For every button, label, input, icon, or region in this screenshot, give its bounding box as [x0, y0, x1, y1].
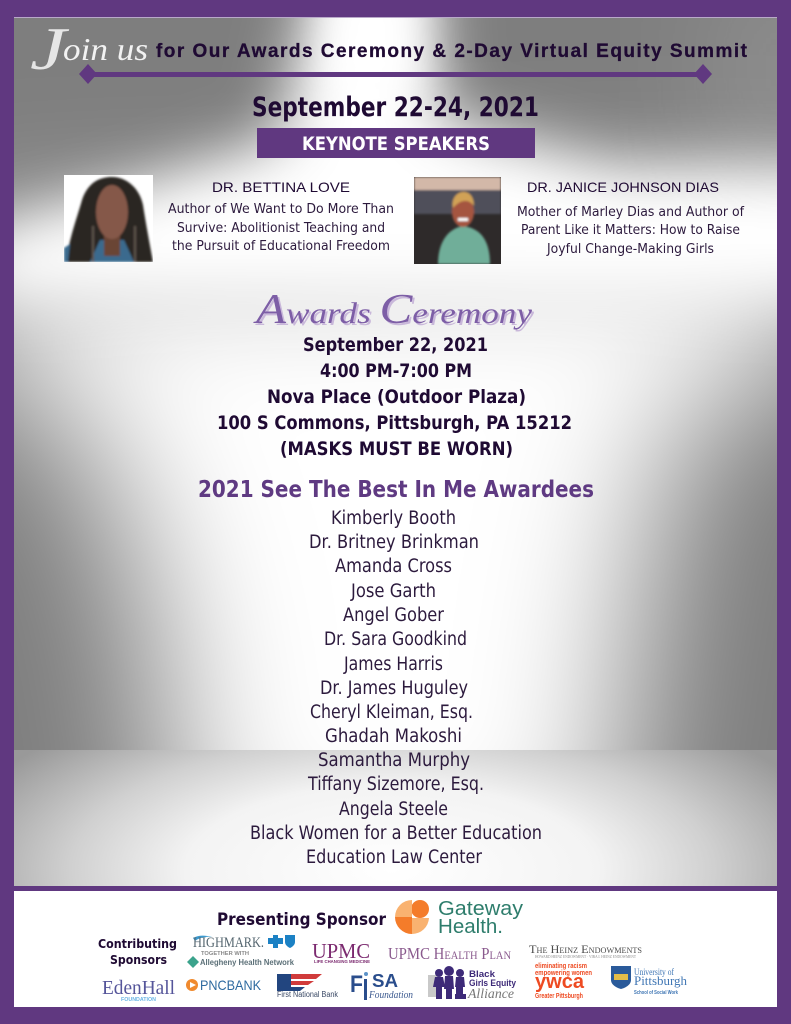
list: awardee names: Dr. Britney Brinkman — [309, 532, 479, 553]
logo: UPMC: LIFE CHANGING MEDICINE — [314, 959, 370, 964]
script heading: Join us: oin us — [63, 31, 148, 67]
text: Dr. Bettina Love bio: DR. BETTINA LOVE — [212, 179, 350, 195]
logo: YWCA Greater Pittsburgh: eliminating racism — [535, 961, 587, 970]
text block: event details — [217, 334, 572, 460]
text block: event details: 100 S Commons, Pittsburgh, PA 15212 — [217, 412, 572, 434]
list: awardee names: Dr. James Huguley — [320, 678, 468, 699]
text: Dr. Bettina Love bio: Survive: Abolitionist Teaching and — [177, 220, 385, 236]
text block: event details: (MASKS MUST BE WORN) — [280, 438, 513, 460]
list: awardee names: Angela Steele — [339, 799, 448, 820]
list: awardee names: Kimberly Booth — [331, 508, 456, 529]
list: awardee names: James Harris — [343, 654, 443, 675]
logo: FISA Foundation — [350, 971, 413, 1001]
logo: University of Pittsburgh: School of Social Work — [634, 990, 679, 996]
text block: event details: Nova Place (Outdoor Plaza) — [267, 386, 526, 408]
logo: Gateway Health — [395, 898, 523, 938]
logo: Gateway Health: Gateway — [438, 898, 523, 920]
list: awardee names: Ghadah Makoshi — [325, 726, 462, 747]
logo: Eden Hall Foundation: FOUNDATION — [121, 997, 156, 1003]
heading: presenting sponsor: Presenting Sponsor — [217, 910, 387, 929]
label: contributing sponsors: Sponsors — [110, 953, 167, 967]
text: Dr. Bettina Love bio: the Pursuit of Educational Freedom — [172, 238, 390, 254]
logo: Highmark and Allegheny Health Network — [187, 935, 295, 968]
script heading: Awards Ceremony: Awards Ceremony — [252, 287, 533, 333]
text: Dr. Janice Johnson Dias bio: Parent Like it Matters: How to Raise — [521, 222, 740, 238]
list: awardee names: Jose Garth — [350, 581, 436, 602]
logo: First National Bank — [277, 974, 339, 999]
text: Dr. Janice Johnson Dias bio — [517, 179, 745, 257]
heading: awardees: 2021 See The Best In Me Awardees — [198, 475, 594, 503]
logo: FISA Foundation: F — [350, 971, 363, 998]
logo: FISA Foundation: SA — [372, 971, 398, 991]
logo: YWCA Greater Pittsburgh: empowering women — [535, 968, 592, 977]
logo: YWCA Greater Pittsburgh — [535, 961, 592, 1000]
list: awardee names: Angel Gober — [343, 605, 444, 626]
logo: UPMC Health Plan: UPMC Health Plan — [388, 944, 511, 963]
logo: Black Girls Equity Alliance: Alliance — [467, 987, 514, 1002]
script heading: Awards Ceremony: Awards Ceremony — [254, 289, 535, 335]
banner: keynote speakers: KEYNOTE SPEAKERS — [302, 134, 490, 155]
logo: Highmark and Allegheny Health Network: Allegheny Health Network — [200, 957, 294, 967]
logo: Highmark and Allegheny Health Network: TOGETHER WITH — [201, 951, 249, 957]
logo: Eden Hall Foundation: EdenHall — [102, 977, 175, 999]
script heading: Join us: J — [30, 16, 69, 82]
label: contributing sponsors — [98, 937, 177, 967]
logo: FISA Foundation: Foundation — [368, 989, 413, 1001]
logo: YWCA Greater Pittsburgh: Greater Pittsburgh — [535, 991, 583, 1000]
text: Dr. Bettina Love bio — [168, 179, 394, 254]
logo: YWCA Greater Pittsburgh: ywca — [535, 971, 585, 993]
banner: keynote speakers — [257, 128, 535, 158]
text: Dr. Janice Johnson Dias bio: DR. JANICE JOHNSON DIAS — [527, 179, 719, 195]
logo: UPMC: UPMC — [312, 939, 370, 963]
logo: Gateway Health: Health. — [438, 916, 503, 938]
logo: First National Bank: First National Bank — [277, 990, 339, 999]
logo: PNC Bank: PNCBANK — [200, 977, 262, 993]
text: Dr. Janice Johnson Dias bio: Joyful Change-Making Girls — [546, 241, 714, 257]
logo: The Heinz Endowments: The Heinz Endowments — [529, 942, 642, 956]
list: awardee names — [250, 508, 542, 868]
heading: dates: September 22-24, 2021 — [252, 92, 539, 123]
heading: summit title: for Our Awards Ceremony & 2-Day Virtual Equity Summit — [156, 41, 748, 62]
logo: Black Girls Equity Alliance: Girls Equity — [469, 978, 517, 989]
text block: event details: 4:00 PM-7:00 PM — [320, 360, 472, 382]
list: awardee names: Black Women for a Better Education — [250, 823, 542, 844]
photo: Dr. Bettina Love — [64, 175, 153, 262]
list: awardee names: Amanda Cross — [335, 556, 452, 577]
logo: University of Pittsburgh — [611, 966, 687, 996]
logo: Highmark and Allegheny Health Network: HIGHMARK. — [193, 935, 264, 951]
text block: event details: September 22, 2021 — [303, 334, 488, 356]
divider with diamonds — [79, 64, 712, 84]
label: contributing sponsors: Contributing — [98, 937, 177, 951]
list: awardee names: Tiffany Sizemore, Esq. — [307, 774, 484, 795]
logo: The Heinz Endowments: HOWARD HEINZ ENDOWMENT · VIRA I. HEINZ ENDOWMENT — [535, 954, 636, 959]
logo: University of Pittsburgh: University of — [634, 967, 675, 978]
script heading: Join us — [30, 16, 148, 82]
panel: sponsors — [14, 886, 777, 1007]
photo: Dr. Janice Johnson Dias — [414, 177, 501, 264]
text: Dr. Janice Johnson Dias bio: Mother of Marley Dias and Author of — [517, 204, 745, 220]
list: awardee names: Cheryl Kleiman, Esq. — [310, 702, 473, 723]
list: awardee names: Samantha Murphy — [318, 750, 470, 771]
logo: University of Pittsburgh: Pittsburgh — [634, 973, 687, 988]
list: awardee names: Dr. Sara Goodkind — [324, 629, 467, 650]
logo: Black Girls Equity Alliance — [428, 966, 517, 1002]
text: Dr. Bettina Love bio: Author of We Want to Do More Than — [168, 201, 394, 217]
logo: Black Girls Equity Alliance: Black — [469, 969, 496, 980]
list: awardee names: Education Law Center — [306, 847, 482, 868]
